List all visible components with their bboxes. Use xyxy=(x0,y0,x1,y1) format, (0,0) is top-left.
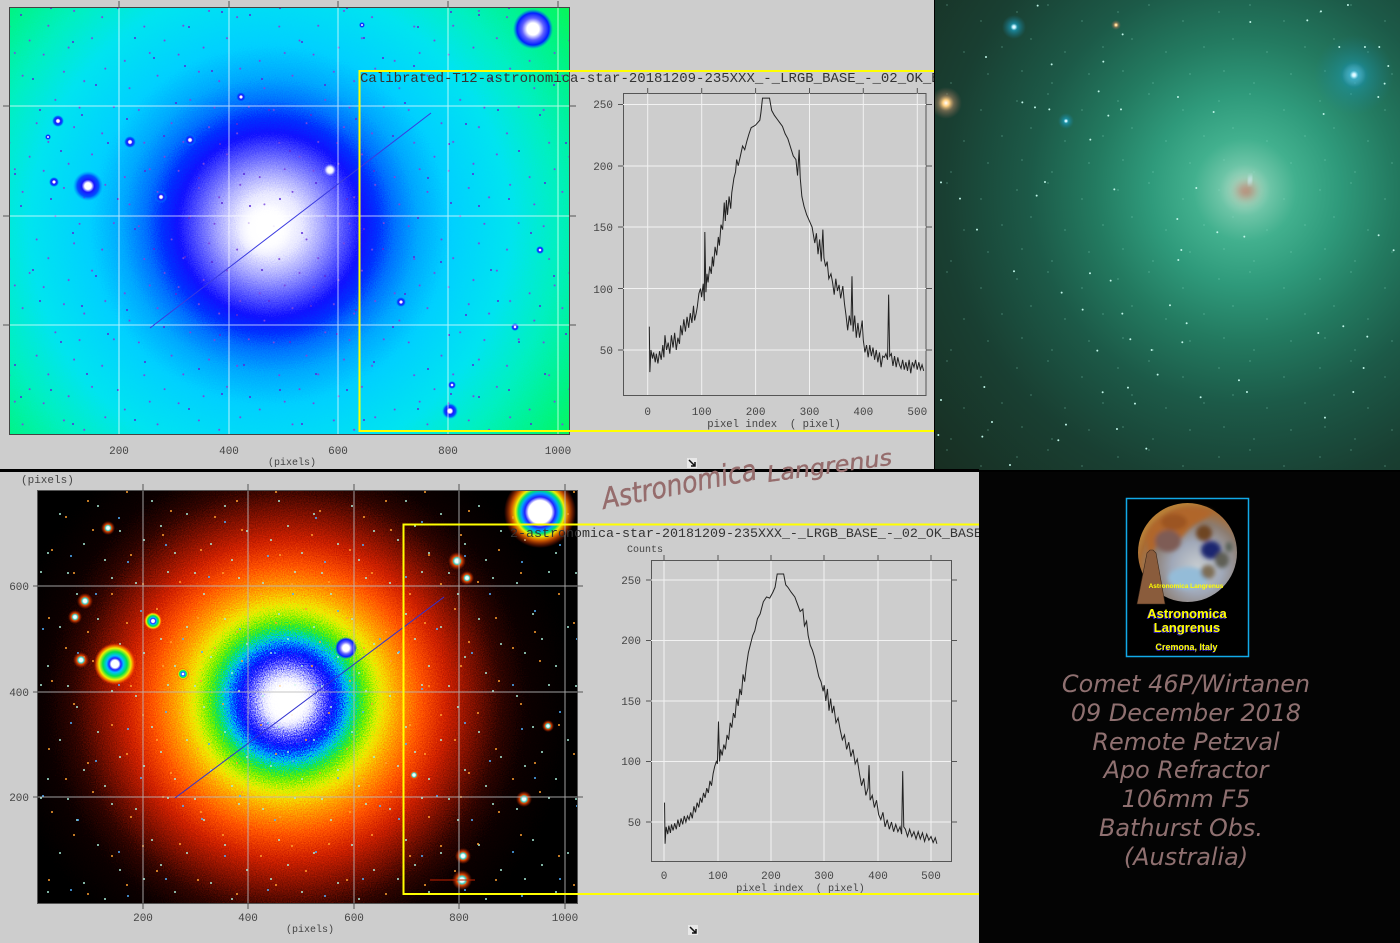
chart x labels: 400 xyxy=(868,871,888,883)
icon: resize handle xyxy=(688,925,698,935)
yellow profile box xyxy=(360,71,934,431)
fine star field xyxy=(935,0,1400,470)
chart x labels: 100 xyxy=(692,407,712,419)
chart x labels xyxy=(627,545,941,895)
x axis labels: (pixels) xyxy=(268,457,316,469)
chart y labels: 200 xyxy=(621,636,641,648)
x axis labels: 600 xyxy=(328,446,348,458)
chart x labels: Counts xyxy=(627,545,663,556)
text block: image credits: Bathurst Obs. xyxy=(1099,814,1263,842)
axis ticks xyxy=(33,484,583,909)
text block: image credits: 09 December 2018 xyxy=(1071,699,1301,727)
logo: Astronomica Langrenus badge xyxy=(1126,498,1248,656)
image grid lines xyxy=(10,8,569,434)
chart x labels: 200 xyxy=(746,407,766,419)
chart x labels: 100 xyxy=(708,871,728,883)
text block: image credits: Comet 46P/Wirtanen xyxy=(1062,670,1310,698)
x axis labels xyxy=(109,446,571,469)
logo name xyxy=(1146,606,1227,636)
axis labels: 400 xyxy=(9,688,29,700)
chart x labels xyxy=(644,407,927,431)
watermark: Astronomica Langrenus xyxy=(597,446,894,516)
logo location: Cremona, Italy xyxy=(1155,642,1218,652)
axis labels: 600 xyxy=(344,913,364,925)
chart y labels: 250 xyxy=(621,576,641,588)
chart y labels: 50 xyxy=(600,346,613,358)
watermark: Astronomica Langrenus: Langrenus xyxy=(765,446,894,488)
panel: top-left blue false-colour analysis xyxy=(0,0,965,470)
axis labels: 800 xyxy=(449,913,469,925)
divider bar xyxy=(0,469,979,472)
image frame xyxy=(38,490,578,904)
logo name: Astronomica xyxy=(1147,606,1227,621)
icon: full moon xyxy=(1138,503,1237,602)
chart y labels: 150 xyxy=(621,697,641,709)
x axis labels: 800 xyxy=(438,446,458,458)
logo name: Langrenus xyxy=(1154,620,1220,635)
chart y labels: 50 xyxy=(628,818,641,830)
x axis labels: 400 xyxy=(219,446,239,458)
text block: image credits: (Australia) xyxy=(1124,843,1248,871)
chart x labels: 300 xyxy=(814,871,834,883)
text block: image credits: Apo Refractor xyxy=(1102,756,1271,784)
text block: image credits: 106mm F5 xyxy=(1122,785,1250,813)
icon: resize handle xyxy=(687,458,697,468)
logo location: Cremona, Italy xyxy=(1155,643,1217,653)
profile title: 2-astronomica-star-20181209-235XXX_-_LRGB_BASE_-_02_OK_BASE xyxy=(510,527,982,542)
chart y labels: 100 xyxy=(621,757,641,769)
chart x labels: pixel index ( pixel) xyxy=(707,419,841,431)
false-colour comet image, blue palette xyxy=(0,0,580,445)
chart y labels: 150 xyxy=(593,223,613,235)
logo name: Astronomica xyxy=(1146,607,1226,622)
profile title: Calibrated-T12-astronomica-star-20181209-235XXX_-_LRGB_BASE_-_02_OK_BASE xyxy=(360,71,965,87)
false-colour comet image, rainbow palette xyxy=(38,491,577,903)
chart y labels: 100 xyxy=(593,285,613,297)
x axis labels: 1000 xyxy=(545,446,571,458)
chart y labels xyxy=(593,100,613,358)
axis labels: 600 xyxy=(9,582,29,594)
axis labels: (pixels) xyxy=(286,924,334,936)
chart x labels: 500 xyxy=(907,407,927,419)
star glows xyxy=(930,15,1394,129)
chart x labels: 0 xyxy=(661,871,667,883)
profile cut line xyxy=(150,113,431,328)
axis labels xyxy=(9,475,578,936)
chart y labels: 250 xyxy=(593,100,613,112)
bright stars xyxy=(938,5,1394,465)
moon caption: Astronomica Langrenus xyxy=(1149,583,1224,590)
axis labels: 1000 xyxy=(552,913,578,925)
axis labels: (pixels) xyxy=(21,475,74,487)
icon: tower xyxy=(1137,550,1165,604)
chart x labels: 0 xyxy=(644,407,651,419)
logo name: Langrenus xyxy=(1153,621,1219,636)
chart x labels: 500 xyxy=(921,871,941,883)
watermark: Astronomica Langrenus: Astronomica xyxy=(597,453,759,516)
axis ticks xyxy=(3,1,576,325)
image grid lines xyxy=(38,491,577,903)
text block: image credits: Remote Petzval xyxy=(1092,728,1280,756)
chart x labels: pixel index ( pixel) xyxy=(736,883,865,895)
profile cut line xyxy=(175,597,444,798)
x axis labels: 200 xyxy=(109,446,129,458)
yellow profile box xyxy=(404,524,979,894)
chart y labels: 200 xyxy=(593,162,613,174)
comet nucleus xyxy=(1237,177,1255,198)
chart x labels: 400 xyxy=(853,407,873,419)
chart x labels: 300 xyxy=(800,407,819,419)
line chart: bottom intensity profile xyxy=(621,545,957,895)
line chart: top intensity profile xyxy=(593,88,932,431)
axis labels: 200 xyxy=(133,913,153,925)
chart y labels xyxy=(621,576,641,830)
axis labels: 200 xyxy=(9,793,29,805)
panel: comet colour photograph xyxy=(930,0,1400,470)
panel: credits background xyxy=(979,472,1400,943)
chart x labels: 200 xyxy=(761,871,781,883)
image frame xyxy=(10,8,570,434)
text block: image credits xyxy=(1062,670,1310,871)
axis labels: 400 xyxy=(238,913,258,925)
panel: bottom-left rainbow false-colour analysis xyxy=(0,472,982,943)
